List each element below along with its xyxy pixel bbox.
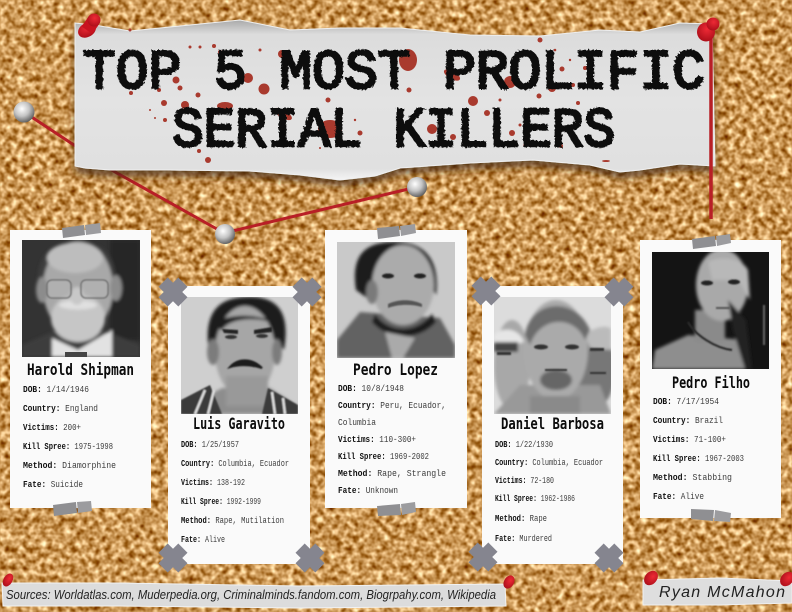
red push pin: title left [75, 14, 100, 41]
signature text: Ryan McMahon [659, 584, 785, 601]
pin: grey centre [215, 224, 235, 244]
card: Pedro Lopez [325, 224, 467, 516]
tape: corners [469, 277, 633, 572]
string: right pin downwards [709, 30, 713, 219]
details: Kill Spree: 1967-2003 [653, 454, 744, 464]
red pin: sources right [501, 573, 517, 591]
name: Pedro Lopez [353, 360, 438, 379]
pin: grey right [407, 177, 427, 197]
pin: grey left [14, 102, 34, 122]
photo: Pedro Filho [652, 249, 769, 369]
string: left pin to title [24, 112, 80, 149]
name: Daniel Barbosa [501, 414, 604, 433]
name: Luis Garavito [193, 414, 285, 433]
tape: bottom [53, 501, 92, 516]
tape: bottom [691, 509, 731, 522]
details: Kill Spree: 1969-2002 [338, 452, 429, 462]
title text: TOP 5 MOST PROLIFIC [83, 41, 705, 105]
details: Fate: Unknown [338, 486, 398, 496]
string: centre pin to right pin [224, 187, 417, 233]
string: under title to centre pin [108, 168, 224, 233]
details [338, 384, 446, 496]
details: Kill Spree: 1962-1986 [495, 494, 575, 504]
details: Method: Diamorphine [23, 461, 116, 471]
card: Pedro Filho [640, 234, 781, 522]
details: Method: Stabbing [653, 473, 732, 483]
details: Country: Brazil [653, 416, 723, 426]
details [181, 440, 289, 545]
details: DOB: 1/25/1957 [181, 440, 239, 450]
photo: Luis Garavito [181, 297, 298, 414]
details: Kill Spree: 1975-1998 [23, 442, 113, 452]
details: Fate: Alive [653, 492, 704, 502]
torn paper strip [75, 20, 715, 180]
sources note [1, 572, 506, 608]
photo: Pedro Lopez [337, 242, 455, 358]
details: Victims: 71-100+ [653, 435, 726, 445]
details: Country: Columbia, Ecuador [495, 458, 603, 468]
details: Method: Rape, Strangle [338, 469, 446, 479]
photo: Harold Shipman [22, 240, 140, 357]
details [653, 397, 744, 502]
tape: top [692, 234, 731, 249]
details: DOB: 1/22/1930 [495, 440, 553, 450]
details: Country: Peru, Ecuador, [338, 401, 446, 411]
details: Victims: 138-192 [181, 478, 245, 488]
photo: Daniel Barbosa [494, 297, 615, 414]
details [495, 440, 603, 544]
red pin: left [1, 572, 15, 588]
blood splatter [128, 28, 610, 163]
details: DOB: 7/17/1954 [653, 397, 719, 407]
name: Harold Shipman [27, 360, 134, 379]
card: Luis Garavito [159, 278, 324, 572]
details: Country: Columbia, Ecuador [181, 459, 289, 469]
tape: corners [159, 278, 324, 572]
title text: SERIAL KILLERS [172, 99, 615, 163]
details: Method: Rape, Mutilation [181, 516, 284, 526]
red pin: signature right [777, 569, 792, 589]
tape: top [377, 224, 416, 239]
signature note [641, 568, 792, 605]
details: Fate: Murdered [495, 534, 552, 544]
sources text: Sources: Worldatlas.com, Muderpedia.org, Criminalminds.fandom.com, Biogrpahy.com, Wikipedia [6, 588, 496, 602]
details: Fate: Suicide [23, 480, 83, 490]
title paper [75, 20, 715, 180]
tape: bottom [377, 502, 416, 516]
details: DOB: 1/14/1946 [23, 385, 89, 395]
details [23, 385, 116, 490]
tape: top [62, 223, 101, 238]
details: Victims: 72-180 [495, 476, 554, 486]
name: Pedro Filho [672, 373, 750, 392]
details: Method: Rape [495, 514, 547, 524]
details: Columbia [338, 418, 377, 428]
red pin: signature left [641, 568, 661, 588]
card: Harold Shipman [10, 223, 151, 516]
details: Victims: 200+ [23, 423, 81, 433]
title text [83, 41, 705, 163]
details: Victims: 110-300+ [338, 435, 416, 445]
details: DOB: 10/8/1948 [338, 384, 404, 394]
details: Fate: Alive [181, 535, 225, 545]
card: Daniel Barbosa [469, 277, 633, 572]
details: Country: England [23, 404, 98, 414]
details: Kill Spree: 1992-1999 [181, 497, 261, 507]
red push pin: title right [697, 18, 720, 42]
